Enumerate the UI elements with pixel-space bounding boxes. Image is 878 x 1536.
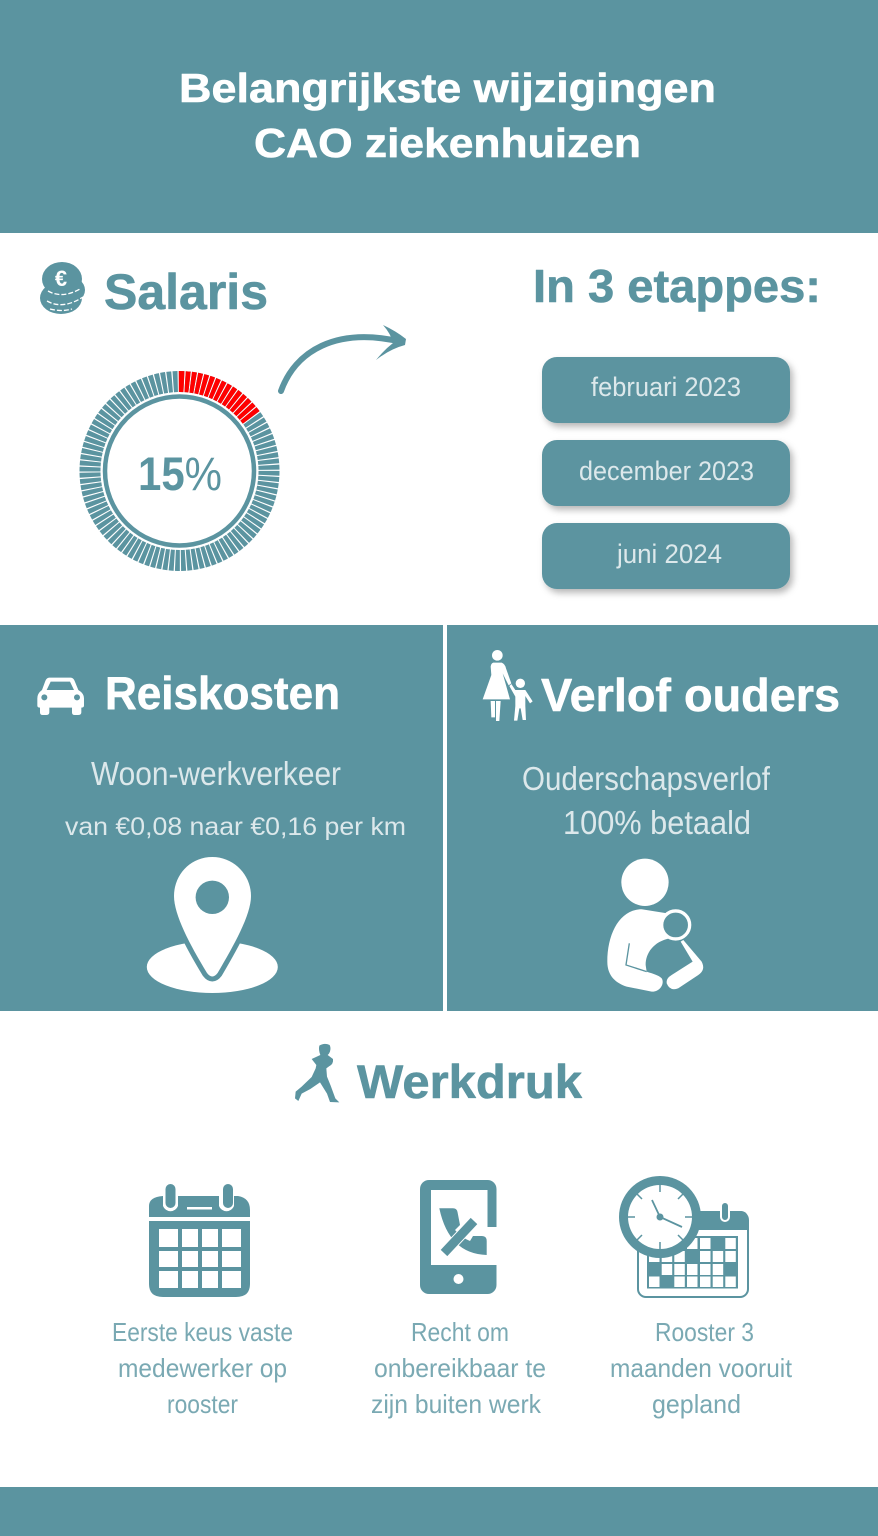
text: rooster vooruit: maanden vooruit — [610, 1353, 793, 1383]
footer band — [0, 1487, 878, 1536]
heading: In 3 etappes: In 3 etappes: — [533, 260, 821, 312]
arrow — [281, 325, 406, 391]
icon: parent with baby — [607, 859, 703, 992]
heading: Werkdruk: Werkdruk — [357, 1055, 583, 1108]
button: februari 2023: februari 2023 — [591, 372, 741, 402]
panel: werkdruk — [112, 1044, 793, 1419]
text: eerste keus: rooster — [167, 1389, 238, 1419]
icon: coins: € — [55, 266, 67, 291]
text: rooster vooruit — [610, 1317, 793, 1419]
text: eerste keus: medewerker op — [118, 1353, 287, 1383]
button: februari 2023 — [542, 357, 790, 423]
button: juni 2024 — [542, 523, 790, 589]
heading: Salaris: Salaris — [104, 264, 268, 320]
text: eerste keus: Eerste keus vaste — [112, 1317, 293, 1347]
text: vergoeding: van €0,08 naar €0,16 per km — [65, 813, 406, 841]
icon: runner — [295, 1044, 339, 1102]
button: december 2023: december 2023 — [579, 456, 754, 486]
title — [179, 65, 716, 166]
panel: verlof ouders — [447, 625, 878, 1011]
icon: calendar — [149, 1184, 250, 1297]
heading: Reiskosten: Reiskosten — [105, 667, 340, 719]
icon: clock and schedule — [619, 1176, 748, 1297]
text: rooster vooruit: gepland — [652, 1389, 741, 1419]
header banner — [0, 0, 878, 233]
text: rooster vooruit: Rooster 3 — [655, 1317, 754, 1347]
icon: car — [37, 678, 84, 715]
icon: coins — [40, 262, 85, 314]
button: juni 2024: juni 2024 — [616, 539, 722, 569]
text: woon-werkverkeer: Woon-werkverkeer — [91, 755, 341, 792]
value: 15% — [138, 447, 222, 500]
title: Belangrijkste wijzigingen — [179, 65, 716, 111]
icon: location pin — [147, 857, 278, 993]
text: 100% betaald: 100% betaald — [563, 804, 751, 841]
panel: reiskosten — [0, 625, 443, 1011]
text: recht om onbereikbaar — [371, 1317, 546, 1419]
text: eerste keus — [112, 1317, 293, 1419]
text: recht om onbereikbaar: Recht om — [411, 1317, 509, 1347]
icon: phone unreachable — [420, 1180, 497, 1294]
chart: 15% ring — [90, 382, 269, 560]
title: CAO ziekenhuizen — [254, 120, 641, 166]
icon: mother and child — [483, 650, 533, 721]
button: december 2023 — [542, 440, 790, 506]
panel: salaris — [40, 260, 821, 589]
text: recht om onbereikbaar: onbereikbaar te — [374, 1353, 546, 1383]
text: ouderschapsverlof: Ouderschapsverlof — [522, 760, 771, 797]
text: recht om onbereikbaar: zijn buiten werk — [371, 1389, 542, 1419]
heading: Verlof ouders: Verlof ouders — [541, 669, 840, 721]
